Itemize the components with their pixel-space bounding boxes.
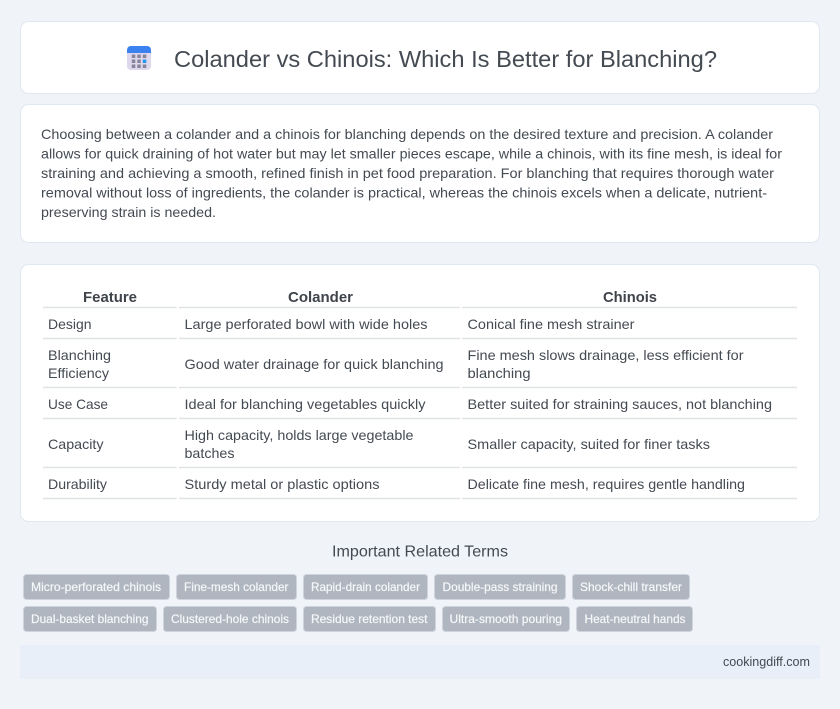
row: capacity [48, 427, 710, 461]
row: use case: Better suited for straining sauces, not blanching [468, 396, 772, 412]
tag: shock-chill transfer [572, 574, 690, 600]
tag: fine-mesh colander: Fine-mesh colander [184, 580, 288, 594]
row: durability: Delicate fine mesh, requires gentle handling [468, 476, 745, 492]
tag: heat-neutral hands [576, 606, 692, 632]
row: blanching efficiency: Good water drainage for quick blanching [184, 356, 444, 372]
tag: ultra-smooth pouring [442, 606, 570, 632]
row: design: Design [48, 316, 92, 332]
row: use case [48, 396, 772, 412]
row: blanching efficiency: blanching [468, 365, 530, 381]
paragraph text: preserving strain is needed. [41, 204, 216, 220]
row: design: Conical fine mesh strainer [468, 316, 635, 332]
row: design [48, 316, 635, 332]
row: capacity: Capacity [48, 436, 104, 452]
tag: dual-basket blanching: Dual-basket blanching [31, 612, 148, 626]
row: capacity: batches [184, 445, 234, 461]
row: durability [48, 476, 745, 492]
tag: double-pass straining [434, 574, 566, 600]
table header: Feature [83, 289, 137, 306]
row: capacity: High capacity, holds large vegetable [184, 427, 414, 443]
paragraph text: straining and achieving a smooth, refined finish in pet food preparation. For blanching that requires thorough water [41, 165, 774, 181]
row: blanching efficiency: Fine mesh slows drainage, less efficient for [468, 347, 744, 363]
tag: heat-neutral hands: Heat-neutral hands [584, 612, 686, 626]
tag: clustered-hole chinois [164, 606, 296, 632]
row: blanching efficiency [48, 347, 744, 381]
tag: rapid-drain colander [304, 574, 428, 600]
panel: intro paragraph [20, 104, 820, 242]
footer [20, 645, 820, 679]
tag: rapid-drain colander: Rapid-drain colander [311, 580, 420, 594]
heading: important related terms: Important Related Terms [332, 544, 508, 560]
tag: ultra-smooth pouring: Ultra-smooth pouring [450, 612, 562, 626]
panel: comparison table [20, 264, 820, 522]
row: blanching efficiency: Efficiency [48, 365, 109, 381]
paragraph text [41, 126, 782, 220]
tag list [24, 574, 692, 632]
tag: fine-mesh colander [176, 574, 296, 600]
paragraph text: allows for quick draining of hot water but may let smaller pieces escape, while a chinois, with its fine mesh, is ideal for [41, 146, 782, 162]
header card [20, 22, 820, 94]
paragraph text: Choosing between a colander and a chinois for blanching depends on the desired texture and precision. A colander [41, 126, 773, 142]
table header: Colander [288, 289, 353, 306]
row: use case: Use Case [48, 396, 108, 412]
title: Colander vs Chinois: Which Is Better for Blanching? [174, 46, 717, 72]
icon: calendar [127, 46, 151, 70]
tag: micro-perforated chinois: Micro-perforated chinois [31, 580, 161, 594]
footer source: cookingdiff.com [723, 654, 810, 669]
tag: shock-chill transfer: Shock-chill transfer [580, 580, 682, 594]
tag: dual-basket blanching [24, 606, 156, 632]
tag: micro-perforated chinois [24, 574, 170, 600]
row: design: Large perforated bowl with wide holes [184, 316, 428, 332]
paragraph text: removal without loss of ingredients, the colander is practical, whereas the chinois excels when a delicate, nutrient- [41, 184, 767, 200]
row: durability: Durability [48, 476, 107, 492]
row: use case: Ideal for blanching vegetables quickly [184, 396, 426, 412]
tag: residue retention test: Residue retention test [311, 612, 428, 626]
row: durability: Sturdy metal or plastic options [184, 476, 380, 492]
tag: clustered-hole chinois: Clustered-hole chinois [171, 612, 289, 626]
tag: double-pass straining: Double-pass straining [442, 580, 558, 594]
tag: residue retention test [304, 606, 436, 632]
table header [83, 289, 657, 306]
row: blanching efficiency: Blanching [48, 347, 111, 363]
row: capacity: Smaller capacity, suited for finer tasks [468, 436, 710, 452]
table header: Chinois [603, 289, 657, 306]
